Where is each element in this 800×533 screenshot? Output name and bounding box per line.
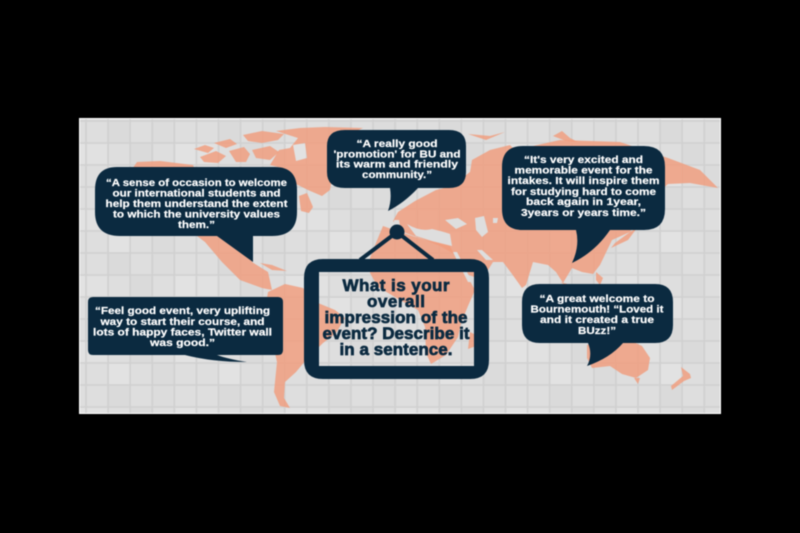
speech bubble: really good promotion: community.” <box>362 169 432 181</box>
speech bubble: sense of occasion: them.” <box>178 219 215 231</box>
map: Northern Russia islands <box>468 131 578 142</box>
speech bubble: great welcome to Bournemouth <box>522 284 673 366</box>
speech bubble: feel good event: “Feel good event, very uplifting <box>95 305 270 317</box>
speech bubble: really good promotion: “A really good <box>356 138 438 150</box>
speech bubble: feel good event: was good.” <box>149 337 215 349</box>
sign question text: What is your <box>342 276 450 295</box>
map: South America <box>265 284 345 408</box>
speech bubble: really good promotion: 'promotion' for BU and <box>334 148 460 160</box>
map: Tasmania <box>634 378 640 384</box>
speech bubble: great welcome to Bournemouth: Bournemouth! “Loved it <box>530 304 664 316</box>
speech bubble: great welcome to Bournemouth: BUzz!” <box>578 325 616 337</box>
map: Alaska and western North America <box>130 161 272 290</box>
map: Australia <box>587 338 650 378</box>
speech bubble: sense of occasion: our international students and <box>112 188 280 200</box>
background panel: tiled wall <box>79 118 721 414</box>
sign frame <box>304 259 489 379</box>
speech bubble: sense of occasion <box>95 167 297 262</box>
map: Indonesia <box>560 272 603 290</box>
speech bubble: feel good event <box>88 297 283 362</box>
map: New Zealand <box>671 367 691 390</box>
sign question text: overall <box>367 292 425 311</box>
world map <box>130 127 718 408</box>
map: Caribbean islands <box>260 263 287 271</box>
map: Greenland and eastern Canada <box>270 127 363 196</box>
speech bubble: very excited and memorable: 3years or years time.” <box>521 207 646 219</box>
speech bubble: sense of occasion: help them understand the extent <box>106 198 288 210</box>
speech bubble: great welcome to Bournemouth: and it created a true <box>540 314 654 326</box>
map: Japan <box>611 228 637 248</box>
map: Canadian Arctic islands <box>194 131 284 163</box>
map: Madagascar <box>468 332 476 349</box>
sign question text: impression of the <box>324 308 468 327</box>
speech bubble: feel good event: lots of happy faces, Twitter wall <box>93 326 272 338</box>
sign question text: in a sentence. <box>340 340 452 359</box>
speech bubble: really good promotion <box>327 130 466 211</box>
speech bubble: very excited and memorable: memorable event for the <box>514 164 653 176</box>
map: inland seas <box>394 216 498 282</box>
speech bubble: sense of occasion: “A sense of occasion to welcome <box>106 177 287 189</box>
speech bubble: great welcome to Bournemouth: “A great welcome to <box>540 293 654 305</box>
speech bubble: very excited and memorable: intakes. It will inspire them <box>508 175 660 187</box>
map: Eurasia <box>393 140 718 288</box>
speech bubble: really good promotion: its warm and friendly <box>336 158 458 170</box>
map: Africa <box>370 226 475 364</box>
sign question text <box>322 276 470 359</box>
sign hanger <box>360 224 433 260</box>
speech bubble: sense of occasion: to which the university values <box>113 208 280 220</box>
speech bubble: very excited and memorable: for studying hard to come <box>511 186 656 198</box>
sign question text: event? Describe it <box>322 324 470 343</box>
hanging sign: question <box>304 224 489 379</box>
speech bubble: feel good event: way to start their course, and <box>99 316 264 328</box>
speech bubble: very excited and memorable <box>502 146 665 263</box>
speech bubble: very excited and memorable: “It's very excited and <box>524 154 643 166</box>
map: Newfoundland and east coast <box>299 193 313 213</box>
speech bubble: very excited and memorable: back again in 1year, <box>526 196 641 208</box>
